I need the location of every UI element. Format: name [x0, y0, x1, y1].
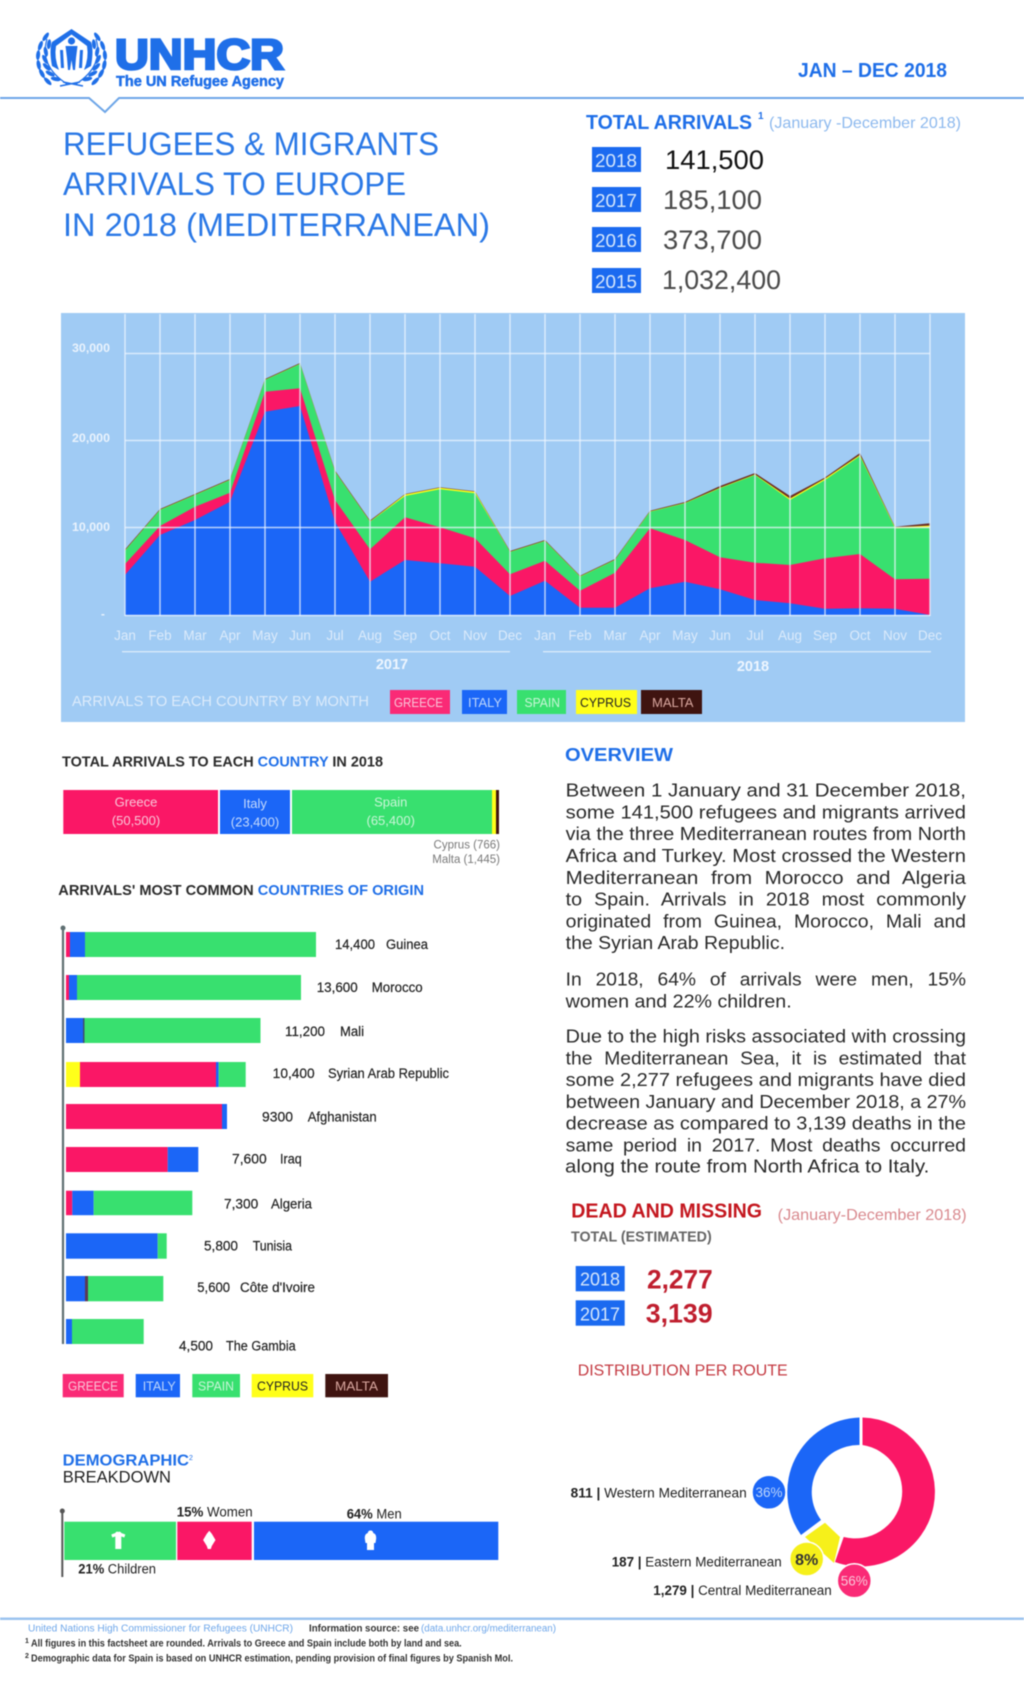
bar: Afghanistan: 9300 [262, 1110, 293, 1125]
label: women: 15% Women [177, 1505, 253, 1520]
year brackets: 2017 [376, 657, 408, 673]
x axis month labels: Feb [568, 628, 592, 643]
overview paragraph 3 [565, 1027, 966, 1177]
title: ARRIVALS TO EUROPE [63, 166, 406, 202]
y axis labels [72, 343, 110, 621]
panel: overview [565, 745, 967, 1177]
panel: total arrivals [586, 111, 961, 295]
slice: Western Mediterranean [787, 1418, 860, 1535]
panel: countries of origin [58, 882, 449, 1397]
heading [63, 1453, 193, 1487]
overview paragraph 3: Due to the high risks associated with crossing [566, 1027, 966, 1047]
legend: GREECE [68, 1378, 118, 1394]
x axis month labels: Jan [114, 628, 136, 643]
stacked bar: arrivals by country: Italy [243, 796, 267, 811]
bar: Syrian Arab Republic [66, 1062, 449, 1087]
legend: ITALY [143, 1378, 176, 1394]
overview paragraph 1: Africa and Turkey. Most crossed the Western [566, 846, 966, 866]
bar: Mali: 11,200 [285, 1024, 325, 1039]
heading: TOTAL ARRIVALS TO EACH COUNTRY IN 2018 [62, 754, 383, 771]
panel: total arrivals to each country [62, 754, 500, 866]
heading: BREAKDOWN [63, 1468, 171, 1487]
bar: Guinea: 14,400 [335, 937, 375, 952]
chart legend: MALTA [652, 695, 694, 710]
chart legend [390, 690, 702, 714]
bar: Mali [66, 1018, 364, 1043]
bar: Côte d'Ivoire: Côte d'Ivoire [240, 1280, 315, 1295]
overview paragraph 1: the Syrian Arab Republic. [566, 933, 785, 953]
overview paragraph 3: some 2,277 refugees and migrants have died [566, 1070, 966, 1090]
overview paragraph 1: via the three Mediterranean routes from North [566, 824, 966, 844]
total 2016: 2016 [595, 231, 637, 251]
footer credit line: Information source: see [309, 1624, 419, 1635]
slice: Central Mediterranean [835, 1418, 935, 1566]
badge: 56% [837, 1564, 871, 1598]
y axis labels: - [101, 609, 105, 621]
bar: The Gambia: The Gambia [226, 1339, 296, 1354]
overview paragraph 3: along the route from North Africa to Italy. [565, 1157, 929, 1177]
footer [0, 1619, 1024, 1665]
bar: Tunisia: 5,800 [204, 1238, 238, 1253]
label: men: 64% Men [347, 1506, 402, 1521]
x axis month labels: Jun [709, 628, 731, 643]
total 2018: 2018 [595, 151, 637, 171]
y axis labels: 20,000 [72, 433, 110, 445]
stacked bar: arrivals by country: (50,500) [112, 813, 160, 828]
overview paragraph 3: same period in 2017. Most deaths occurred [566, 1135, 966, 1155]
bar: Afghanistan: Afghanistan [308, 1110, 377, 1125]
total 2017: 2017 [595, 191, 637, 211]
bar: Algeria [66, 1191, 312, 1215]
x axis month labels: Jun [289, 628, 311, 643]
overview paragraph 1: originated from Guinea, Morocco, Mali and [566, 911, 966, 931]
bar: Syrian Arab Republic: Syrian Arab Republic [328, 1066, 449, 1081]
bar: Iraq: Iraq [280, 1151, 302, 1166]
chart caption: ARRIVALS TO EACH COUNTRY BY MONTH [72, 693, 369, 710]
overview paragraph 1 [566, 781, 967, 953]
area: Spain [125, 364, 930, 615]
footer credit line [28, 1624, 556, 1635]
legend: SPAIN [198, 1378, 234, 1394]
x axis month labels [114, 628, 942, 643]
total 2017: 185,100 [663, 185, 762, 215]
icon: woman [203, 1531, 216, 1549]
x axis month labels: Jul [746, 628, 764, 643]
bar: The Gambia: 4,500 [179, 1339, 213, 1354]
x axis month labels: Apr [639, 628, 661, 643]
heading: ARRIVALS' MOST COMMON COUNTRIES OF ORIGIN [58, 882, 424, 899]
legend: CYPRUS [257, 1378, 308, 1394]
icon: man [365, 1530, 376, 1550]
icon: child [111, 1532, 125, 1549]
bar: Iraq: 7,600 [232, 1151, 267, 1166]
area: Malta [125, 363, 930, 615]
panel: dead and missing [571, 1200, 967, 1598]
title [63, 126, 490, 243]
heading: DEAD AND MISSING [571, 1200, 762, 1222]
overview paragraph 1: to Spain. Arrivals in 2018 most commonly [566, 889, 966, 909]
deaths 2017: 2017 [580, 1305, 620, 1325]
total 2016: 373,700 [663, 225, 762, 255]
bar: Tunisia [66, 1233, 292, 1259]
header rule with notch [0, 98, 1024, 112]
total arrivals heading: TOTAL ARRIVALS [586, 112, 752, 134]
chart legend: ITALY [468, 695, 502, 710]
label: children: 21% Children [78, 1561, 156, 1576]
axis [60, 1508, 65, 1577]
stacked bar: arrivals by country: (65,400) [366, 813, 415, 828]
overview paragraph 3: between January and December 2018, a 27% [566, 1092, 966, 1112]
x axis month labels: Oct [429, 628, 451, 643]
segment: children [64, 1522, 176, 1560]
x axis month labels: Dec [498, 628, 522, 643]
title: IN 2018 (MEDITERRANEAN) [63, 207, 490, 243]
deaths 2018 [576, 1264, 713, 1294]
x axis month labels: Feb [148, 628, 172, 643]
logo tagline: The UN Refugee Agency [116, 73, 285, 90]
total 2018 [592, 145, 764, 175]
heading: DEMOGRAPHIC [63, 1453, 189, 1470]
bar: The Gambia [66, 1319, 296, 1354]
axis [60, 926, 66, 1344]
area: Greece [125, 388, 930, 615]
date range: JAN – DEC 2018 [798, 60, 947, 82]
overview paragraph 2 [565, 970, 966, 1011]
deaths 2017: 3,139 [646, 1298, 713, 1328]
badge: 56%: 56% [841, 1574, 868, 1588]
badge: 36% [752, 1475, 786, 1509]
logo wordmark: UNHCR [115, 31, 284, 79]
x axis month labels: Apr [219, 628, 241, 643]
bar: Morocco: 13,600 [317, 980, 358, 995]
slice: Eastern Mediterranean [805, 1523, 840, 1563]
overview paragraph 1: Mediterranean from Morocco and Algeria [566, 868, 967, 888]
footer credit line: (data.unhcr.org/mediterranean) [421, 1624, 556, 1635]
donut chart [787, 1418, 935, 1566]
deaths 2018: 2018 [580, 1270, 620, 1290]
year brackets [122, 652, 931, 675]
label: Eastern Mediterranean: 187 | Eastern Mediterranean [612, 1555, 782, 1570]
bar: Guinea: Guinea [386, 937, 428, 952]
label: Central Mediterranean: 1,279 | Central Mediterranean [653, 1583, 832, 1598]
chart legend: SPAIN [524, 695, 560, 710]
footer credit line: United Nations High Commissioner for Refugees (UNHCR) [28, 1624, 293, 1635]
small-country notes [432, 840, 500, 866]
x axis month labels: Mar [603, 628, 627, 643]
overview paragraph 2: In 2018, 64% of arrivals were men, 15% [566, 970, 966, 990]
bar: Iraq [66, 1147, 302, 1172]
total arrivals heading: (January -December 2018) [769, 115, 961, 132]
distribution heading: DISTRIBUTION PER ROUTE [578, 1362, 788, 1379]
subheading: TOTAL (ESTIMATED) [571, 1229, 712, 1246]
area: Cyprus [125, 364, 930, 615]
stacked bar: arrivals by country [63, 790, 499, 834]
x axis month labels: Sep [393, 628, 417, 643]
panel: monthly arrivals area chart [61, 313, 965, 722]
panel: demographic breakdown [60, 1453, 498, 1577]
stacked area chart [125, 314, 930, 616]
overview paragraph 1: Between 1 January and 31 December 2018, [566, 781, 966, 801]
small-country notes: Cyprus (766) [434, 840, 500, 852]
total arrivals heading: 1 [758, 111, 764, 122]
logo: UNHCR [36, 29, 285, 90]
footnote 1: 1 [25, 1638, 29, 1645]
footnote 2: 2 [25, 1653, 29, 1660]
badge: 36%: 36% [755, 1485, 783, 1500]
footnote 2: Demographic data for Spain is based on UNHCR estimation, pending provision of final figures by Spanish MoI. [31, 1654, 513, 1665]
chart legend: GREECE [394, 695, 443, 710]
legend: MALTA [335, 1378, 378, 1394]
footnote 1: All figures in this factsheet are rounded. Arrivals to Greece and Spain include both by land and sea. [31, 1639, 462, 1650]
title: REFUGEES & MIGRANTS [63, 126, 439, 162]
total 2015: 2015 [595, 272, 637, 292]
y axis labels: 30,000 [72, 343, 110, 355]
stacked bar: arrivals by country: Greece [115, 795, 157, 810]
x axis month labels: Jan [534, 628, 556, 643]
x axis month labels: Mar [183, 628, 207, 643]
stacked bar: arrivals by country: (23,400) [231, 815, 279, 830]
overview paragraph 2: women and 22% children. [565, 991, 792, 1011]
x axis month labels: Sep [813, 628, 837, 643]
x axis month labels: Aug [778, 628, 802, 643]
label: Western Mediterranean: 811 | Western Mediterranean [571, 1486, 747, 1501]
bar: Mali: Mali [340, 1024, 364, 1039]
x axis month labels: Nov [463, 628, 487, 643]
overview paragraph 3: decrease as compared to 3,139 deaths in the [566, 1114, 966, 1134]
bar: Algeria: 7,300 [224, 1196, 258, 1211]
badge: 8% [790, 1542, 824, 1576]
bar: Côte d'Ivoire [66, 1276, 315, 1301]
x axis month labels: Nov [883, 628, 907, 643]
year brackets: 2018 [737, 659, 769, 675]
overview paragraph 3: the Mediterranean Sea, it is estimated that [566, 1048, 966, 1068]
deaths 2017 [576, 1298, 713, 1328]
total 2016 [592, 225, 762, 255]
x axis month labels: Jul [326, 628, 344, 643]
small-country notes: Malta (1,445) [432, 854, 500, 866]
bar: Côte d'Ivoire: 5,600 [197, 1280, 230, 1295]
heading: 2 [189, 1455, 193, 1462]
y axis labels: 10,000 [72, 522, 110, 534]
x axis month labels: Aug [358, 628, 382, 643]
total 2015: 1,032,400 [662, 265, 781, 295]
bar: Afghanistan [66, 1104, 377, 1129]
icon: UNHCR emblem [36, 29, 107, 86]
grid lines [125, 314, 930, 616]
overview paragraph 1: some 141,500 refugees and migrants arrived [566, 802, 966, 822]
x axis month labels: Oct [849, 628, 871, 643]
area: Italy [125, 406, 930, 615]
bar: Algeria: Algeria [271, 1196, 312, 1211]
x axis month labels: May [252, 628, 278, 643]
bar: Morocco: Morocco [372, 980, 423, 995]
total 2018: 141,500 [665, 145, 764, 175]
total arrivals heading [586, 111, 961, 134]
x axis month labels: Dec [918, 628, 942, 643]
bar: Guinea [66, 932, 428, 957]
segment: men [254, 1522, 498, 1560]
chart legend: CYPRUS [580, 695, 631, 710]
deaths 2018: 2,277 [647, 1264, 713, 1294]
bar: Morocco [66, 975, 423, 1000]
bar: Syrian Arab Republic: 10,400 [273, 1066, 315, 1081]
stacked bar: arrivals by country: Spain [374, 795, 407, 810]
segment: women [177, 1522, 252, 1560]
overview heading: OVERVIEW [565, 745, 673, 765]
badge: 8%: 8% [795, 1552, 818, 1569]
bar: Tunisia: Tunisia [253, 1238, 292, 1253]
total 2015 [592, 265, 781, 295]
total 2017 [592, 185, 762, 215]
date range note: (January-December 2018) [778, 1207, 967, 1224]
x axis month labels: May [672, 628, 698, 643]
legend [63, 1374, 388, 1397]
